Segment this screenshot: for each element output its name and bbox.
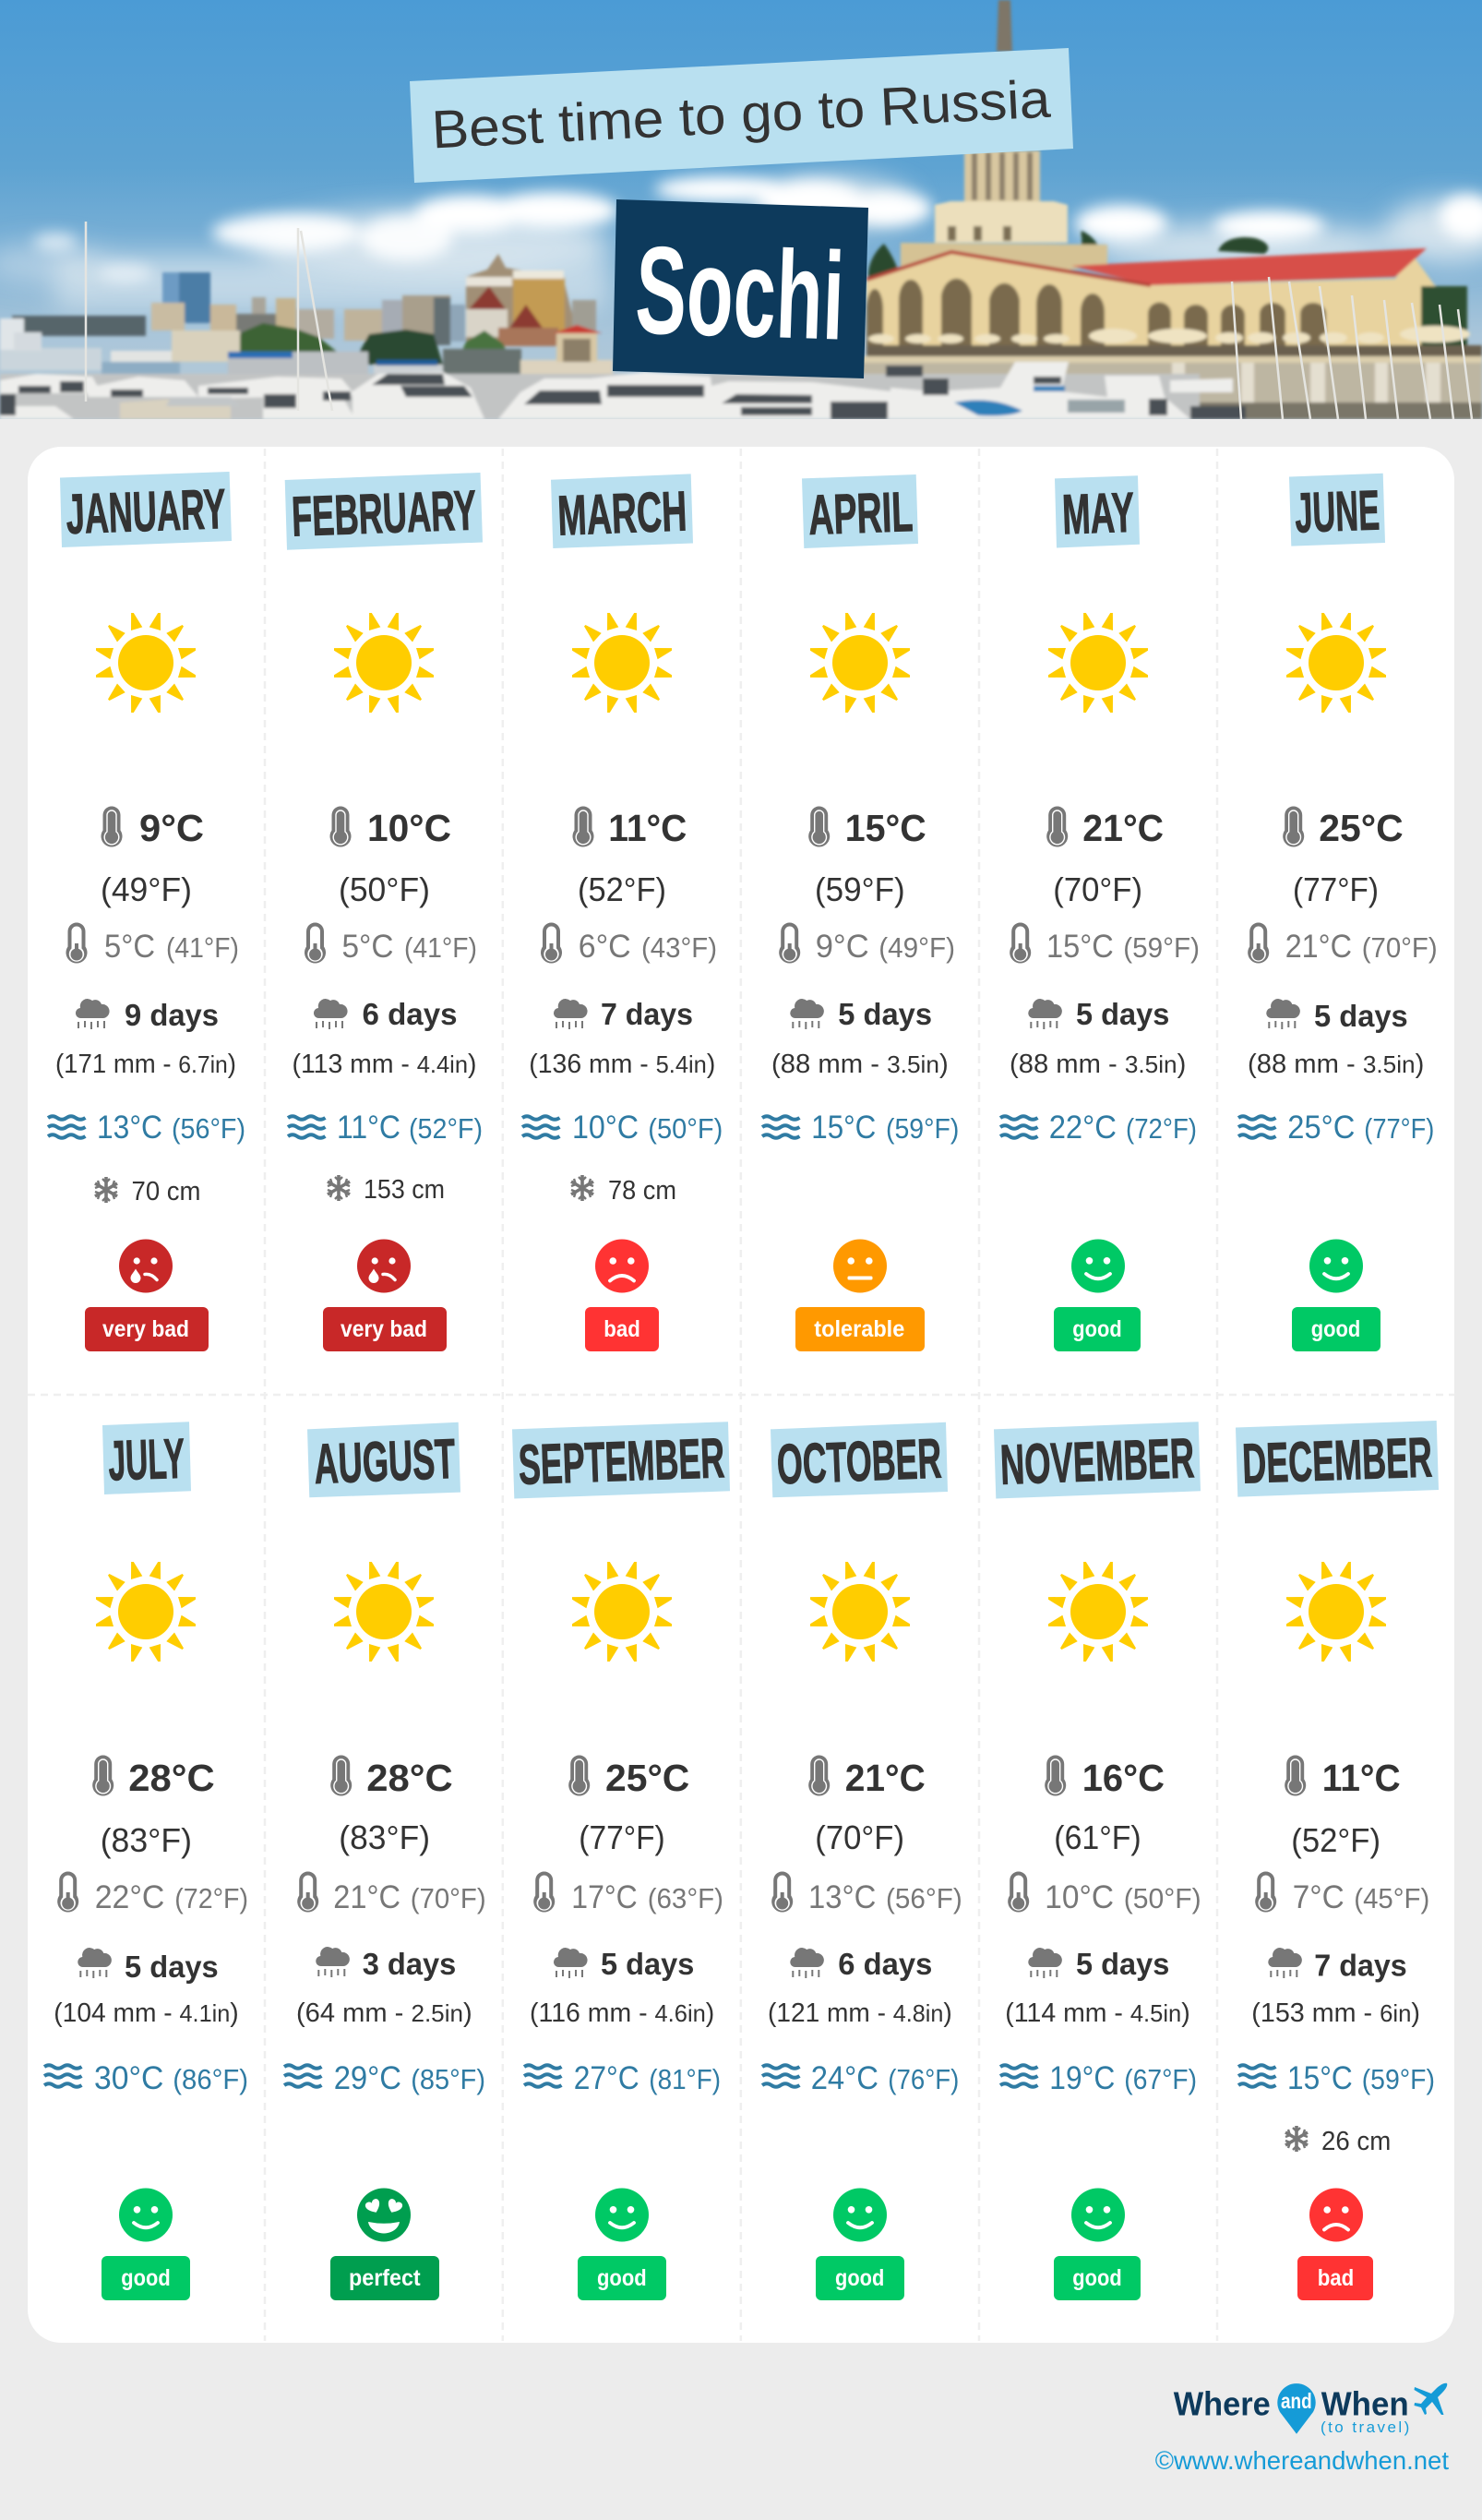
high temperature: (52°F) — [1291, 1821, 1380, 1859]
icon: sun — [1048, 1562, 1148, 1662]
rating: good — [1054, 1239, 1141, 1351]
high temperature: 10°C — [367, 807, 451, 849]
sea temperature: (81°F) — [649, 2063, 721, 2095]
rain — [529, 997, 715, 1079]
low temperature — [541, 923, 717, 965]
low temperature: (70°F) — [411, 1882, 486, 1914]
sea temperature: 27°C — [574, 2060, 639, 2096]
month label: OCTOBER — [776, 1427, 942, 1495]
high temperature: 28°C — [366, 1757, 453, 1799]
rain: 3 days — [363, 1947, 456, 1981]
low temperature: 7°C — [1293, 1879, 1345, 1915]
rating: bad — [1297, 2188, 1373, 2300]
low temperature — [1255, 1872, 1429, 1915]
rating: very bad — [323, 1239, 447, 1351]
high temperature — [568, 1756, 689, 1856]
sea temperature: 25°C — [1287, 1110, 1355, 1146]
panel: June — [1238, 474, 1438, 1351]
month label: FEBRUARY — [291, 478, 477, 548]
high temperature: 11°C — [608, 807, 687, 849]
snow depth — [328, 1175, 445, 1205]
low temperature: 13°C — [808, 1879, 876, 1915]
snow depth: 26 cm — [1321, 2127, 1391, 2156]
rain — [55, 998, 236, 1079]
high temperature — [330, 1756, 453, 1856]
rain: (136 mm - 5.4in) — [529, 1050, 715, 1079]
rating: very bad: very bad — [341, 1316, 427, 1342]
rating: good: good — [597, 2265, 647, 2291]
icon: sun — [96, 1562, 196, 1662]
rain: (88 mm - 3.5in) — [771, 1050, 949, 1079]
low temperature: 10°C — [1045, 1879, 1114, 1915]
sea temperature — [1000, 1110, 1197, 1146]
month label: AUGUST — [313, 1427, 457, 1495]
low temperature: 22°C — [95, 1879, 164, 1915]
month label: MARCH — [556, 479, 688, 547]
sea temperature: 10°C — [572, 1110, 639, 1146]
low temperature: 9°C — [816, 929, 869, 965]
rating: good — [578, 2188, 666, 2300]
low temperature: (49°F) — [878, 931, 955, 964]
sea temperature: (77°F) — [1364, 1112, 1434, 1145]
high temperature: (77°F) — [579, 1818, 665, 1856]
panel: December — [1236, 1421, 1439, 2300]
title text: Best time to go to Russia — [430, 69, 1052, 160]
high temperature: 28°C — [128, 1757, 215, 1799]
high temperature: (52°F) — [578, 870, 666, 908]
month label — [285, 473, 483, 550]
panel: January — [48, 472, 245, 1351]
rain: (88 mm - 3.5in) — [1010, 1050, 1186, 1079]
rain: (64 mm - 2.5in) — [296, 1998, 472, 2028]
low temperature — [1010, 923, 1200, 965]
snow depth — [1285, 2126, 1391, 2156]
high temperature — [572, 807, 687, 908]
low temperature: (63°F) — [648, 1882, 723, 1914]
high temperature — [1283, 807, 1404, 908]
month label: NOVEMBER — [999, 1426, 1195, 1496]
rain: (171 mm - 6.7in) — [55, 1050, 236, 1079]
rain: 7 days — [1314, 1948, 1407, 1983]
logo: Where and When: Where — [1174, 2385, 1271, 2423]
snow depth: 70 cm — [131, 1177, 201, 1206]
month label: APRIL — [807, 480, 914, 546]
month label — [307, 1422, 460, 1497]
sea temperature: 22°C — [1049, 1110, 1117, 1146]
rain: 5 days — [125, 1950, 219, 1984]
sea temperature — [1000, 2060, 1197, 2096]
snow depth — [571, 1175, 676, 1206]
month label — [1289, 474, 1385, 546]
rating: good — [1292, 1239, 1380, 1351]
month label: JUNE — [1294, 478, 1380, 545]
rating: good: good — [835, 2265, 884, 2291]
month label: SEPTEMBER — [518, 1426, 725, 1496]
rating: bad: bad — [604, 1316, 640, 1342]
rain: 6 days — [838, 1947, 932, 1981]
low temperature: 17°C — [571, 1879, 638, 1915]
panel: August — [284, 1422, 486, 2300]
high temperature: 21°C — [845, 1757, 926, 1799]
high temperature: (59°F) — [815, 870, 905, 908]
low temperature — [305, 923, 477, 965]
rain: (113 mm - 4.4in) — [292, 1050, 476, 1079]
sea temperature: (67°F) — [1124, 2063, 1197, 2095]
month label: MAY — [1061, 481, 1135, 546]
rain — [768, 1947, 952, 2028]
sea temperature — [1238, 2060, 1435, 2096]
panel: July — [44, 1422, 248, 2300]
sea temperature: 30°C — [94, 2060, 163, 2096]
high temperature — [101, 807, 204, 908]
low temperature: (43°F) — [641, 931, 717, 964]
low temperature: (41°F) — [404, 931, 477, 964]
sea temperature — [48, 1110, 245, 1146]
rating: tolerable: tolerable — [814, 1316, 904, 1342]
sea temperature — [1238, 1110, 1434, 1146]
high temperature: 16°C — [1082, 1757, 1165, 1799]
icon: sun — [572, 613, 672, 713]
rating: good — [816, 2188, 904, 2300]
sea temperature: 15°C — [1287, 2060, 1353, 2096]
rating: good: good — [1072, 1316, 1122, 1342]
icon: sun — [572, 1562, 672, 1662]
low temperature: 15°C — [1046, 929, 1114, 965]
sea temperature: (72°F) — [1126, 1112, 1197, 1145]
icon: sun — [96, 613, 196, 713]
rain: 5 days — [1076, 997, 1169, 1031]
rating: good — [102, 2188, 190, 2300]
city banner — [613, 199, 868, 378]
logo: Where and When: When — [1321, 2385, 1409, 2423]
low temperature: 21°C — [333, 1879, 400, 1915]
sea temperature: 11°C — [337, 1110, 400, 1146]
sea temperature: 13°C — [97, 1110, 162, 1146]
month label — [551, 474, 693, 548]
low temperature — [297, 1872, 486, 1915]
rain — [1010, 997, 1186, 1079]
sea temperature — [44, 2060, 248, 2096]
sea temperature: 24°C — [811, 2060, 878, 2096]
high temperature — [1285, 1756, 1401, 1859]
low temperature — [1008, 1872, 1201, 1915]
sea temperature: 29°C — [334, 2060, 401, 2096]
low temperature: (56°F) — [886, 1882, 962, 1914]
icon: sun — [810, 1562, 910, 1662]
low temperature: (59°F) — [1123, 931, 1200, 964]
rating: perfect — [330, 2188, 439, 2300]
icon: sun — [334, 1562, 434, 1662]
website credit: ©www.whereandwhen.net — [1155, 2446, 1449, 2475]
sea temperature — [762, 1110, 959, 1146]
low temperature: (41°F) — [166, 931, 239, 964]
rating: bad: bad — [1318, 2265, 1354, 2291]
sea temperature: (52°F) — [409, 1112, 483, 1145]
icon: sun — [810, 613, 910, 713]
month label — [802, 474, 918, 548]
low temperature: (45°F) — [1354, 1882, 1429, 1914]
rain: (153 mm - 6in) — [1251, 1998, 1420, 2028]
high temperature: (61°F) — [1054, 1818, 1141, 1856]
rain: (116 mm - 4.6in) — [530, 1998, 714, 2028]
rain — [771, 997, 949, 1079]
high temperature: (83°F) — [339, 1818, 430, 1856]
icon: sun — [1286, 613, 1386, 713]
high temperature: (70°F) — [815, 1818, 904, 1856]
high temperature — [808, 807, 926, 908]
sea temperature: (59°F) — [886, 1112, 959, 1145]
sea temperature — [288, 1110, 483, 1146]
sea temperature — [762, 2060, 959, 2096]
rain — [1005, 1947, 1190, 2028]
low temperature: 21°C — [1285, 929, 1352, 965]
icon: map pin — [1277, 2383, 1316, 2434]
month label — [60, 472, 232, 547]
icon: sun — [1286, 1562, 1386, 1662]
low temperature: 5°C — [104, 929, 155, 965]
panel: May — [1000, 475, 1200, 1351]
snow depth: 78 cm — [608, 1176, 676, 1206]
sea temperature: (76°F) — [888, 2063, 959, 2095]
month label: JULY — [107, 1427, 185, 1492]
rain: 7 days — [601, 997, 693, 1031]
panel: November — [994, 1422, 1201, 2300]
high temperature: 11°C — [1322, 1757, 1401, 1799]
high temperature — [92, 1756, 215, 1859]
logo: Where and When: (to travel) — [1321, 2418, 1409, 2436]
rain: 5 days — [1314, 999, 1408, 1033]
snow depth: 153 cm — [364, 1175, 445, 1205]
rating: good: good — [121, 2265, 171, 2291]
icon: sun — [334, 613, 434, 713]
low temperature: 5°C — [341, 929, 393, 965]
sea temperature: 15°C — [811, 1110, 876, 1146]
rain: (114 mm - 4.5in) — [1005, 1998, 1190, 2028]
city name: Sochi — [633, 220, 846, 366]
rating: good: good — [1311, 1316, 1360, 1342]
rain — [1251, 1948, 1420, 2028]
low temperature — [66, 923, 239, 965]
month label — [771, 1422, 948, 1497]
panel: February — [285, 473, 483, 1351]
sea temperature — [524, 2060, 721, 2096]
panel: March — [522, 474, 723, 1351]
sea temperature — [522, 1110, 723, 1146]
low temperature: 6°C — [579, 929, 631, 965]
month label — [994, 1422, 1201, 1499]
rating: very bad: very bad — [102, 1316, 189, 1342]
rain — [1248, 999, 1424, 1079]
rain: (121 mm - 4.8in) — [768, 1998, 952, 2028]
rain: 6 days — [362, 997, 458, 1031]
rain — [296, 1947, 472, 2028]
high temperature: (77°F) — [1293, 870, 1379, 908]
sea temperature: (50°F) — [648, 1112, 723, 1145]
month label — [102, 1422, 191, 1494]
snow depth — [95, 1177, 201, 1206]
high temperature — [1046, 807, 1164, 908]
rain: 5 days — [1076, 1947, 1169, 1981]
logo: Where and When — [1174, 2383, 1447, 2436]
month label — [1055, 475, 1140, 548]
low temperature — [771, 1872, 962, 1915]
high temperature: 15°C — [845, 807, 926, 849]
icon: plane — [1414, 2383, 1447, 2415]
month label — [512, 1422, 730, 1499]
high temperature: 21°C — [1082, 807, 1164, 849]
rain: 9 days — [125, 998, 219, 1032]
rating: tolerable — [795, 1239, 925, 1351]
rating: very bad — [85, 1239, 209, 1351]
panel: calendar card — [28, 447, 1454, 2343]
high temperature: 25°C — [1319, 807, 1404, 849]
rating: good: good — [1072, 2265, 1122, 2291]
rain — [54, 1948, 239, 2028]
low temperature — [1248, 923, 1438, 965]
rain: 5 days — [601, 1947, 694, 1981]
low temperature: (70°F) — [1362, 931, 1438, 964]
rain: (104 mm - 4.1in) — [54, 1998, 239, 2028]
icon: sun — [1048, 613, 1148, 713]
header photo: Sochi marina and sea terminal — [0, 0, 1482, 419]
high temperature — [330, 807, 451, 908]
low temperature: (72°F) — [174, 1882, 248, 1914]
high temperature: (50°F) — [339, 870, 430, 908]
high temperature — [1045, 1756, 1165, 1856]
sea temperature: (86°F) — [173, 2063, 248, 2095]
rain: (88 mm - 3.5in) — [1248, 1050, 1424, 1079]
high temperature — [808, 1756, 926, 1856]
rain — [292, 997, 476, 1079]
panel: October — [762, 1422, 962, 2300]
rating: bad — [585, 1239, 659, 1351]
sea temperature: (56°F) — [172, 1112, 245, 1145]
high temperature: 9°C — [139, 807, 204, 849]
month label: JANUARY — [65, 477, 227, 546]
high temperature: 25°C — [605, 1757, 689, 1799]
low temperature — [57, 1872, 248, 1915]
rating: good — [1054, 2188, 1141, 2300]
panel: April — [762, 474, 959, 1351]
rating: perfect: perfect — [349, 2265, 421, 2291]
sea temperature: 19°C — [1049, 2060, 1115, 2096]
logo: Where and When: and — [1281, 2389, 1312, 2413]
high temperature: (70°F) — [1053, 870, 1142, 908]
low temperature: (50°F) — [1124, 1882, 1201, 1914]
sea temperature: (59°F) — [1362, 2063, 1435, 2095]
sea temperature: (85°F) — [411, 2063, 485, 2095]
panel: September — [512, 1422, 730, 2300]
high temperature: (49°F) — [101, 870, 192, 908]
title banner — [410, 48, 1073, 183]
low temperature — [779, 923, 955, 965]
rain: 5 days — [838, 997, 932, 1031]
rain — [530, 1947, 714, 2028]
sea temperature — [284, 2060, 485, 2096]
high temperature: (83°F) — [101, 1821, 192, 1859]
low temperature — [533, 1872, 723, 1915]
